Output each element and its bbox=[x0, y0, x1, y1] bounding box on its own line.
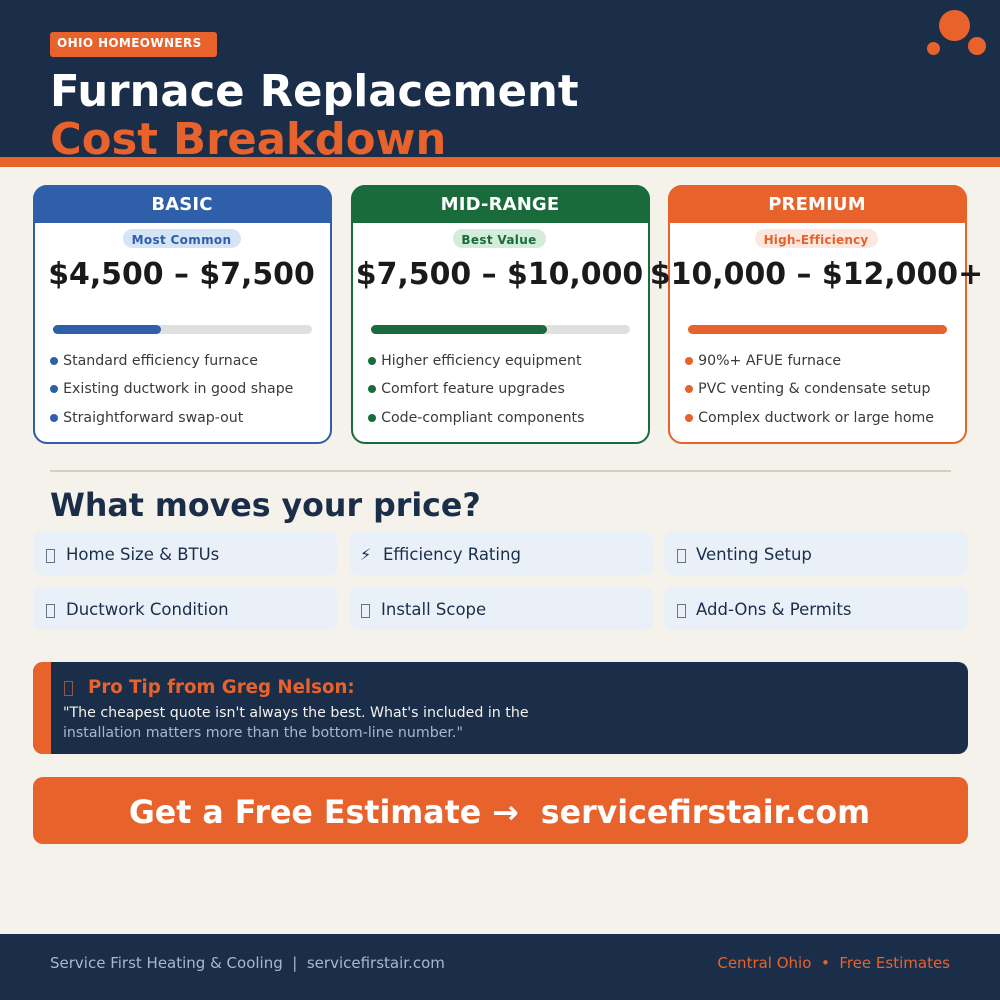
tag: best value bbox=[452, 228, 546, 248]
callout accent bbox=[33, 662, 51, 754]
feature list: premium: PVC venting & condensate setup bbox=[698, 381, 930, 397]
call to action: Get a Free Estimate → servicefirstair.com bbox=[129, 795, 870, 831]
factor grid bbox=[33, 532, 968, 630]
factor: ductwork bbox=[33, 587, 337, 630]
cost bar: mid-range bbox=[370, 324, 630, 334]
callout: pro tip bbox=[33, 662, 968, 754]
title line 1: Furnace Replacement bbox=[50, 67, 579, 117]
price: basic: $4,500 – $7,500 bbox=[48, 256, 315, 292]
price: premium: $10,000 – $12,000+ bbox=[650, 256, 983, 292]
factor: venting: Venting Setup bbox=[696, 545, 812, 564]
panel: mid-range tier bbox=[351, 185, 650, 444]
section heading: What moves your price? bbox=[50, 488, 481, 524]
factor: home size bbox=[33, 532, 337, 575]
panel: premium tier bbox=[668, 185, 967, 444]
factor: venting bbox=[664, 532, 968, 575]
tag: high-efficiency bbox=[754, 228, 878, 248]
tag: best value: Best Value bbox=[461, 232, 537, 246]
quote line 2: installation matters more than the bottom-line number." bbox=[63, 725, 463, 741]
feature list: basic: Standard efficiency furnace bbox=[63, 353, 258, 369]
feature list: premium: 90%+ AFUE furnace bbox=[698, 353, 841, 369]
feature list: premium bbox=[685, 353, 934, 426]
feature list: mid-range: Code-compliant components bbox=[381, 410, 584, 426]
price: mid-range: $7,500 – $10,000 bbox=[356, 256, 643, 292]
tag: most common bbox=[122, 228, 240, 248]
footer company: Service First Heating & Cooling | servicefirstair.com bbox=[50, 954, 445, 972]
factor: efficiency bbox=[349, 532, 653, 575]
title line 2: Cost Breakdown bbox=[50, 115, 446, 165]
feature list: basic: Existing ductwork in good shape bbox=[63, 381, 293, 397]
tag: most common: Most Common bbox=[132, 232, 231, 246]
footer bbox=[0, 934, 1000, 1000]
orange header rule bbox=[0, 157, 1000, 167]
footer region: Central Ohio • Free Estimates bbox=[717, 954, 950, 972]
pro tip heading: Pro Tip from Greg Nelson: bbox=[88, 677, 355, 698]
feature list: mid-range: Comfort feature upgrades bbox=[381, 381, 565, 397]
pro tip icon bbox=[64, 681, 73, 696]
badge: Ohio homeowners bbox=[50, 32, 217, 57]
cost bar: basic bbox=[52, 324, 312, 334]
mid-range heading bbox=[350, 184, 650, 222]
feature list: mid-range: Higher efficiency equipment bbox=[381, 353, 582, 369]
factor: install scope bbox=[349, 587, 653, 630]
premium heading bbox=[668, 184, 966, 222]
premium heading: PREMIUM bbox=[768, 194, 866, 214]
panel: basic tier bbox=[33, 185, 332, 444]
call to action bbox=[33, 777, 968, 844]
factor: install scope: Install Scope bbox=[381, 600, 486, 619]
feature list: basic bbox=[50, 353, 293, 426]
factor: add-ons bbox=[664, 587, 968, 630]
factor: home size: Home Size & BTUs bbox=[66, 545, 219, 564]
basic heading bbox=[32, 184, 332, 222]
mid-range heading: MID-RANGE bbox=[441, 194, 559, 214]
factor: efficiency: Efficiency Rating bbox=[383, 545, 521, 564]
factor: add-ons: Add-Ons & Permits bbox=[696, 600, 852, 619]
badge: Ohio homeowners: OHIO HOMEOWNERS bbox=[57, 36, 202, 50]
cost bar: premium bbox=[688, 324, 946, 334]
feature list: basic: Straightforward swap-out bbox=[63, 410, 243, 426]
tag: high-efficiency: High-Efficiency bbox=[764, 232, 868, 246]
factor: ductwork: Ductwork Condition bbox=[66, 600, 229, 619]
header band bbox=[0, 0, 1000, 167]
feature list: premium: Complex ductwork or large home bbox=[698, 410, 934, 426]
basic heading: BASIC bbox=[151, 194, 213, 214]
factor: efficiency: ⚡ bbox=[360, 545, 371, 564]
icon: three circles bbox=[927, 10, 986, 55]
feature list: mid-range bbox=[368, 353, 584, 426]
quote line 1: "The cheapest quote isn't always the best. What's included in the bbox=[63, 705, 529, 721]
